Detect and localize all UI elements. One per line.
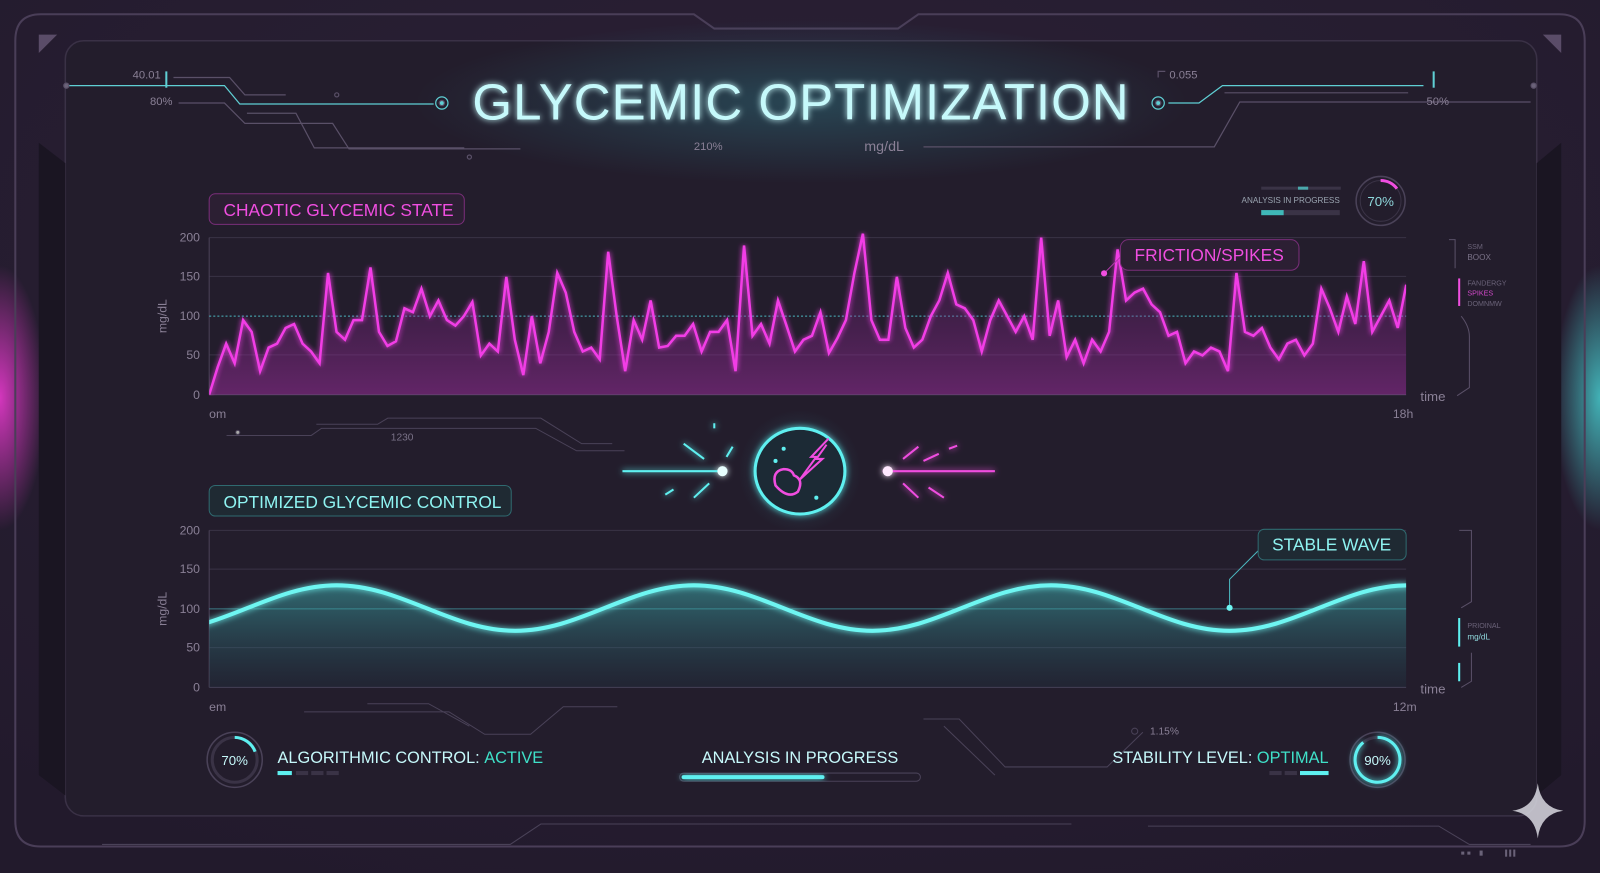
- side legend top: BOOX: [1467, 253, 1491, 262]
- callout: friction/spikes: [1101, 240, 1299, 276]
- status: stability level: [1112, 749, 1329, 775]
- chart: chaotic: time: [1420, 389, 1445, 404]
- gauge 70% bottom left: 70%: [221, 753, 248, 768]
- callout: stable wave: [1227, 529, 1406, 611]
- gauge 70% top: [1356, 176, 1405, 225]
- status: analysis in progress: [680, 749, 920, 781]
- chart: optimized: em: [209, 700, 226, 714]
- side legend bottom: PRIOINAL: [1467, 622, 1501, 630]
- status: stability level: STABILITY LEVEL: OPTIMAL: [1112, 749, 1329, 767]
- chart: optimized: 200: [180, 523, 200, 537]
- icon: sparkle: [1512, 783, 1563, 838]
- connectors mid left: [227, 418, 624, 451]
- connectors mid left: 1230: [391, 433, 414, 444]
- chart: chaotic: 150: [180, 269, 200, 283]
- status: algorithmic control: [278, 749, 543, 775]
- bottom connectors: [102, 704, 1531, 844]
- label: chaotic: [209, 194, 464, 224]
- side legend top: [1449, 240, 1507, 396]
- callout: friction/spikes: FRICTION/SPIKES: [1135, 245, 1284, 265]
- chart: optimized: 150: [180, 562, 200, 576]
- chart: chaotic: 100: [180, 309, 200, 323]
- bottom connectors: 1.15%: [1150, 726, 1179, 737]
- chart: chaotic: om: [209, 407, 226, 421]
- chart: chaotic: [155, 231, 1445, 421]
- gauge 90% bottom right: [1350, 732, 1405, 787]
- callout: stable wave: STABLE WAVE: [1272, 535, 1391, 555]
- chart: optimized: 0: [193, 680, 200, 694]
- title glow: [413, 20, 1189, 184]
- side legend top: SPIKES: [1467, 290, 1493, 298]
- chart: optimized: 50: [186, 641, 200, 655]
- side legend bottom: [1458, 530, 1501, 687]
- chart: optimized: [155, 523, 1445, 714]
- analysis status top right: [1242, 187, 1341, 215]
- chart: chaotic: 0: [193, 388, 200, 402]
- small numbers: 50%: [1427, 96, 1449, 108]
- small numbers: 40.01: [133, 70, 161, 82]
- chart: optimized: 12m: [1393, 700, 1417, 714]
- gauge 70% bottom left: [207, 732, 262, 787]
- chart: chaotic: 200: [180, 231, 200, 245]
- side legend bottom: mg/dL: [1467, 632, 1490, 641]
- chart: chaotic: mg/dL: [155, 299, 169, 333]
- status: analysis in progress: ANALYSIS IN PROGRESS: [702, 749, 898, 767]
- status: algorithmic control: ALGORITHMIC CONTROL: ACTIVE: [278, 749, 543, 767]
- chart: optimized: 100: [180, 602, 200, 616]
- circuit lines left: [64, 71, 1536, 159]
- gauge 70% top: 70%: [1367, 194, 1394, 209]
- small numbers: [133, 70, 1449, 155]
- small numbers: 80%: [150, 96, 172, 108]
- side legend top: SSM: [1467, 243, 1483, 251]
- title: GLYCEMIC OPTIMIZATION: [472, 73, 1130, 130]
- chart: chaotic: 18h: [1393, 407, 1413, 421]
- label: chaotic: CHAOTIC GLYCEMIC STATE: [223, 200, 454, 220]
- small numbers: 0.055: [1169, 70, 1197, 82]
- chart: optimized: mg/dL: [155, 592, 169, 626]
- side legend top: DOMNMW: [1467, 300, 1502, 308]
- icon: central cell with bolt and sparks: [622, 410, 995, 532]
- gauge 90% bottom right: 90%: [1364, 753, 1391, 768]
- chart: chaotic: 50: [186, 348, 200, 362]
- side legend top: FANDERGY: [1467, 280, 1507, 288]
- label: optimized: [209, 485, 511, 516]
- small numbers: mg/dL: [864, 139, 904, 155]
- analysis status top right: ANALYSIS IN PROGRESS: [1242, 196, 1340, 205]
- label: optimized: OPTIMIZED GLYCEMIC CONTROL: [223, 492, 502, 512]
- chart: optimized: time: [1420, 682, 1445, 697]
- small numbers: 210%: [694, 141, 723, 153]
